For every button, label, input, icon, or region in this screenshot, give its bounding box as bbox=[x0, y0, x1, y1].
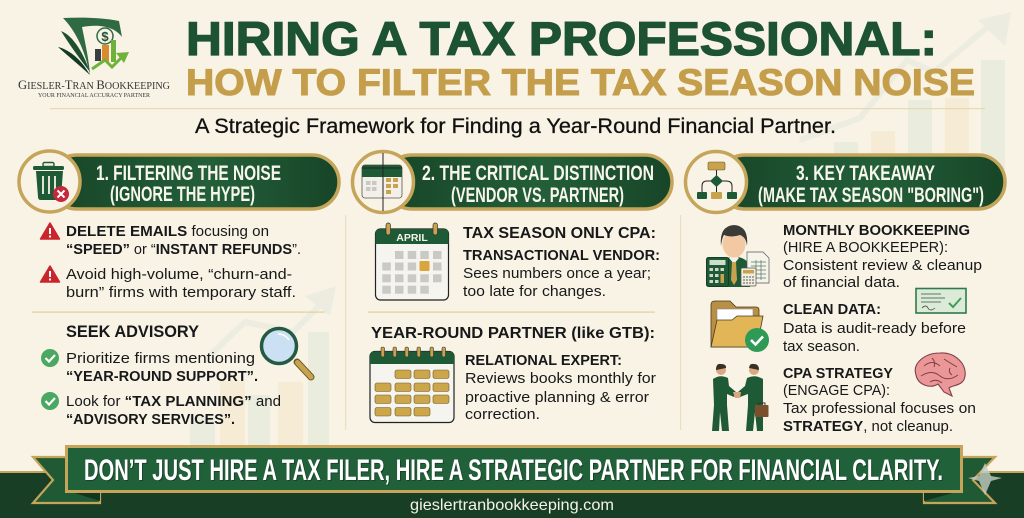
tax season only CPA block bbox=[463, 225, 660, 300]
website url: gieslertranbookkeeping.com bbox=[410, 497, 614, 514]
relational expert block: correction. bbox=[465, 406, 540, 423]
logo bbox=[18, 18, 170, 99]
relational expert block bbox=[465, 353, 656, 423]
footer band bbox=[0, 446, 1024, 518]
monthly bookkeeping block: (HIRE A BOOKKEEPER): bbox=[783, 239, 948, 256]
relational expert block: Reviews books monthly for bbox=[465, 370, 656, 387]
icon: magnifying glass bbox=[262, 328, 311, 377]
logo: GIESLER-TRAN BOOKKEEPING bbox=[18, 78, 170, 92]
icon: bookkeeper bbox=[706, 225, 769, 287]
subtitle: A Strategic Framework for Finding a Year-Round Financial Partner. bbox=[195, 115, 836, 138]
icon: april calendar: APRIL bbox=[396, 232, 428, 244]
icon: trash can bbox=[33, 162, 69, 202]
title: HOW TO FILTER THE TAX SEASON NOISE bbox=[186, 62, 975, 103]
warning items: DELETE EMAILS focusing on bbox=[66, 223, 269, 240]
CPA strategy block: Tax professional focuses on bbox=[783, 400, 976, 417]
clean data block: CLEAN DATA: bbox=[783, 302, 881, 318]
icon: flow chart bbox=[697, 162, 737, 199]
background chart: top right bbox=[800, 12, 1011, 170]
icon: handshake bbox=[712, 364, 768, 431]
icon: brain bbox=[915, 353, 965, 396]
warning items: Avoid high-volume, “churn-and- bbox=[66, 266, 292, 283]
CPA strategy block: (ENGAGE CPA): bbox=[783, 382, 890, 399]
icon: folder bbox=[711, 301, 769, 352]
warning items bbox=[40, 223, 301, 301]
warning items: burn” firms with temporary staff. bbox=[66, 284, 296, 301]
clean data block bbox=[783, 302, 966, 355]
icon: split calendar bbox=[362, 153, 402, 211]
tax season only CPA block: too late for changes. bbox=[463, 283, 606, 300]
CPA strategy block: STRATEGY, not cleanup. bbox=[783, 418, 953, 435]
monthly bookkeeping block: Consistent review & cleanup bbox=[783, 257, 982, 274]
clean data block: Data is audit-ready before bbox=[783, 320, 966, 337]
banner bbox=[66, 446, 962, 492]
tax season only CPA block: TAX SEASON ONLY CPA: bbox=[463, 225, 656, 242]
sparkle bbox=[968, 463, 1002, 495]
title bbox=[186, 12, 975, 103]
icon: monthly calendar bbox=[370, 347, 454, 422]
header pill 2 bbox=[352, 152, 672, 212]
background chart: lower left bbox=[190, 286, 336, 445]
seek advisory: Prioritize firms mentioning bbox=[66, 350, 255, 367]
header pill 1: 1. FILTERING THE NOISE bbox=[96, 161, 281, 185]
monthly bookkeeping block: MONTHLY BOOKKEEPING bbox=[783, 223, 970, 239]
panel: key takeaway bbox=[686, 152, 1005, 435]
header pill 1: (IGNORE THE HYPE) bbox=[110, 182, 255, 206]
monthly bookkeeping block bbox=[783, 223, 982, 291]
monthly bookkeeping block: of financial data. bbox=[783, 274, 900, 291]
seek advisory: “ADVISORY SERVICES”. bbox=[66, 412, 235, 428]
panel: filtering the noise bbox=[19, 151, 339, 428]
seek advisory bbox=[41, 323, 281, 428]
tax season only CPA block: TRANSACTIONAL VENDOR: bbox=[463, 248, 660, 264]
icon: check document bbox=[916, 288, 966, 313]
year-round partner heading: YEAR-ROUND PARTNER (like GTB): bbox=[371, 325, 655, 342]
tax season only CPA block: Sees numbers once a year; bbox=[463, 265, 651, 282]
header pill 1 bbox=[19, 151, 339, 212]
relational expert block: RELATIONAL EXPERT: bbox=[465, 353, 622, 369]
seek advisory: SEEK ADVISORY bbox=[66, 323, 199, 341]
title: HIRING A TAX PROFESSIONAL: bbox=[186, 12, 937, 65]
header pill 3: 3. KEY TAKEAWAY bbox=[796, 161, 935, 185]
icon: april calendar bbox=[376, 223, 448, 300]
CPA strategy block: CPA STRATEGY bbox=[783, 366, 893, 382]
CPA strategy block bbox=[783, 366, 976, 435]
panel: critical distinction bbox=[352, 152, 672, 423]
header pill 2: (VENDOR VS. PARTNER) bbox=[451, 183, 624, 207]
seek advisory: Look for “TAX PLANNING” and bbox=[66, 393, 281, 410]
banner ribbon tails bbox=[33, 457, 995, 503]
logo: $ bbox=[101, 29, 109, 44]
relational expert block: proactive planning & error bbox=[465, 389, 649, 406]
logo: YOUR FINANCIAL ACCURACY PARTNER bbox=[38, 93, 150, 99]
warning items: “SPEED” or “INSTANT REFUNDS”. bbox=[66, 241, 301, 258]
header pill 2: 2. THE CRITICAL DISTINCTION bbox=[422, 161, 654, 185]
header pill 3 bbox=[686, 152, 1005, 212]
seek advisory: “YEAR-ROUND SUPPORT”. bbox=[66, 369, 258, 385]
clean data block: tax season. bbox=[783, 338, 860, 355]
